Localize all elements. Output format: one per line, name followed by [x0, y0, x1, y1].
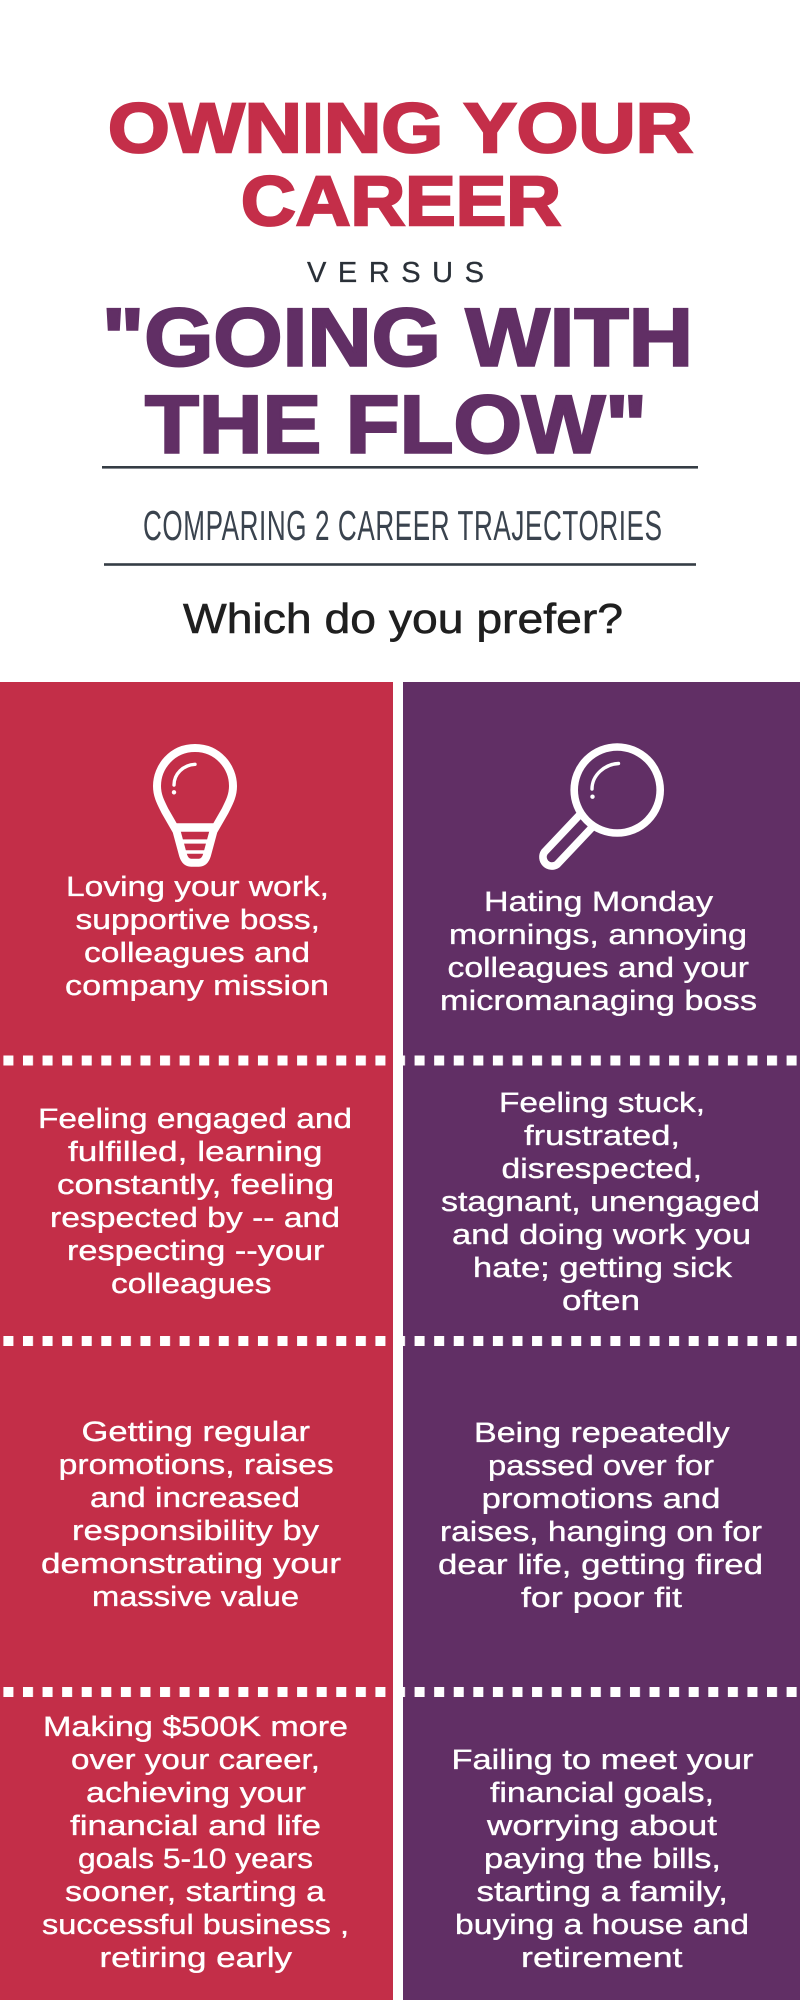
- icon: magnifying glass: [543, 747, 660, 866]
- text: failing to meet your goals: paying the bills,: [484, 1843, 721, 1874]
- text: being repeatedly passed over: raises, hanging on for: [440, 1516, 762, 1547]
- text: loving your work: colleagues and: [84, 937, 310, 968]
- text: feeling engaged: respecting --your: [67, 1235, 324, 1266]
- text: being repeatedly passed over: dear life, getting fired: [438, 1549, 763, 1580]
- text: loving your work: company mission: [65, 970, 329, 1001]
- text: feeling engaged: respected by -- and: [50, 1202, 340, 1233]
- text: making $500K more: Making $500K more: [43, 1711, 348, 1742]
- text: being repeatedly passed over: passed over for: [488, 1450, 714, 1481]
- text: feeling engaged: fulfilled, learning: [68, 1136, 322, 1167]
- text: failing to meet your goals: Failing to meet your: [452, 1744, 754, 1775]
- text: loving your work: Loving your work,: [66, 871, 329, 902]
- title: going with the flow: THE FLOW": [145, 380, 647, 470]
- text: getting regular promotions: massive value: [92, 1581, 299, 1612]
- icon: light bulb: [157, 748, 233, 863]
- text: making $500K more: over your career,: [71, 1744, 320, 1775]
- text: feeling engaged: colleagues: [111, 1268, 272, 1299]
- dotted divider 2: [0, 1336, 800, 1346]
- title: owning your career: OWNING YOUR: [108, 89, 693, 167]
- rule above subtitle: [102, 466, 698, 469]
- text: feeling stuck: often: [562, 1285, 640, 1316]
- text: being repeatedly passed over: [438, 1417, 763, 1613]
- text: feeling engaged: constantly, feeling: [57, 1169, 334, 1200]
- text: feeling engaged: Feeling engaged and: [38, 1103, 352, 1134]
- dotted divider 1: [0, 1056, 800, 1066]
- text: feeling stuck: stagnant, unengaged: [441, 1186, 760, 1217]
- text: getting regular promotions: [41, 1416, 341, 1612]
- text: failing to meet your goals: [452, 1744, 754, 1973]
- text: getting regular promotions: responsibility by: [72, 1515, 319, 1546]
- text: feeling stuck: hate; getting sick: [473, 1252, 733, 1283]
- dotted divider 3: [0, 1687, 800, 1697]
- text: making $500K more: successful business ,: [42, 1909, 349, 1940]
- text: feeling stuck: Feeling stuck,: [499, 1087, 705, 1118]
- text: making $500K more: retiring early: [100, 1942, 292, 1973]
- text: making $500K more: sooner, starting a: [65, 1876, 326, 1907]
- title: going with the flow: [102, 292, 693, 470]
- title: going with the flow: "GOING WITH: [102, 292, 693, 384]
- text: making $500K more: goals 5-10 years: [78, 1843, 313, 1874]
- question: Which do you prefer?: [183, 595, 623, 642]
- panel: owning your career column: [0, 682, 393, 2000]
- text: failing to meet your goals: worrying about: [486, 1810, 717, 1841]
- text: getting regular promotions: Getting regular: [82, 1416, 310, 1447]
- text: hating monday: Hating Monday: [484, 886, 713, 917]
- text: hating monday: [440, 886, 757, 1016]
- text: making $500K more: achieving your: [86, 1777, 306, 1808]
- title: owning your career: [108, 89, 693, 240]
- text: loving your work: supportive boss,: [76, 904, 320, 935]
- header: [102, 89, 698, 642]
- text: making $500K more: [42, 1711, 349, 1973]
- text: hating monday: mornings, annoying: [449, 919, 747, 950]
- text: feeling stuck: and doing work you: [452, 1219, 751, 1250]
- text: loving your work: [65, 871, 329, 1001]
- text: hating monday: colleagues and your: [448, 952, 749, 983]
- panel: going with the flow column: [403, 682, 800, 2000]
- text: getting regular promotions: demonstrating your: [41, 1548, 341, 1579]
- text: feeling stuck: [441, 1087, 760, 1316]
- text: failing to meet your goals: buying a house and: [455, 1909, 749, 1940]
- text: failing to meet your goals: retirement: [521, 1942, 683, 1973]
- text: making $500K more: financial and life: [70, 1810, 321, 1841]
- text: feeling stuck: frustrated,: [524, 1120, 680, 1151]
- text: failing to meet your goals: financial goals,: [490, 1777, 714, 1808]
- text: being repeatedly passed over: promotions and: [482, 1483, 720, 1514]
- text: failing to meet your goals: starting a family,: [476, 1876, 728, 1907]
- versus label: VERSUS: [307, 257, 484, 289]
- text: hating monday: micromanaging boss: [440, 985, 757, 1016]
- title: owning your career: CAREER: [241, 162, 561, 240]
- text: getting regular promotions: promotions, raises: [59, 1449, 334, 1480]
- subtitle: COMPARING 2 CAREER TRAJECTORIES: [143, 502, 662, 549]
- text: getting regular promotions: and increased: [90, 1482, 300, 1513]
- text: feeling engaged: [38, 1103, 352, 1299]
- text: being repeatedly passed over: Being repeatedly: [474, 1417, 730, 1448]
- rule below subtitle: [104, 563, 696, 566]
- text: feeling stuck: disrespected,: [502, 1153, 702, 1184]
- text: being repeatedly passed over: for poor fit: [521, 1582, 682, 1613]
